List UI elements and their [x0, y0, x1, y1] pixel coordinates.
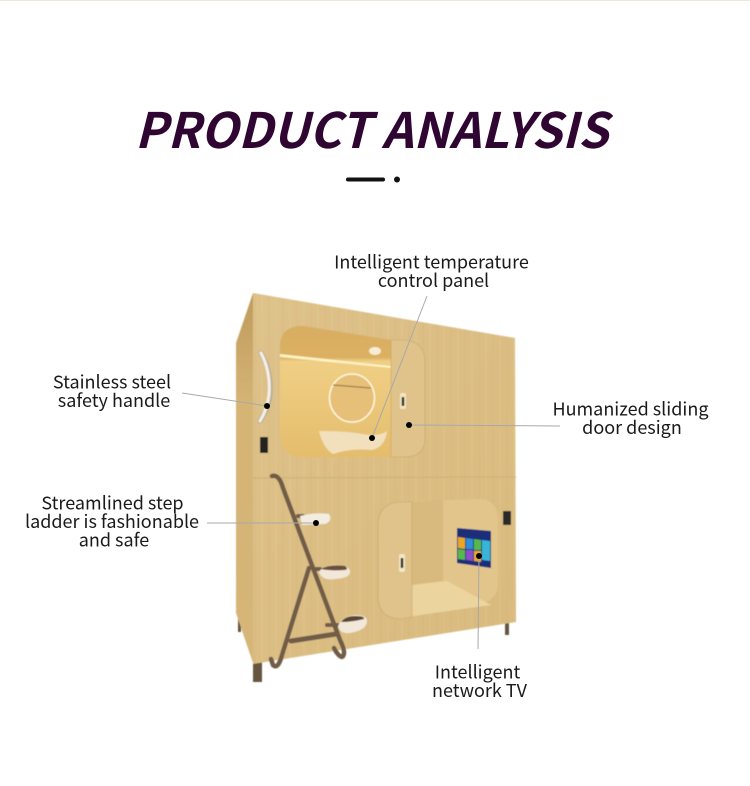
label: network TV: Intelligent	[435, 658, 520, 684]
socket lower	[503, 511, 511, 525]
label: step ladder: ladder is fashionable	[25, 508, 199, 534]
mirror	[330, 374, 374, 422]
title divider	[346, 176, 400, 182]
label: safety handle: Stainless steel	[53, 368, 171, 394]
label: sliding door: Humanized sliding	[552, 396, 709, 422]
lower window	[378, 499, 498, 619]
label: network TV: network TV	[432, 677, 528, 703]
title: PRODUCT ANALYSIS	[135, 93, 614, 163]
cabin side panel	[236, 293, 253, 663]
upper window	[280, 326, 391, 457]
door lock	[400, 393, 406, 409]
lower window back wall	[412, 500, 443, 585]
ladder	[271, 476, 344, 666]
safety handle	[260, 353, 270, 421]
leader lines	[182, 296, 560, 649]
label: step ladder: and safe	[79, 526, 149, 552]
marker dots	[264, 403, 482, 559]
socket upper	[260, 437, 268, 453]
capsule cabin illustration	[236, 293, 516, 682]
label: safety handle: safety handle	[58, 387, 170, 413]
sliding door	[391, 340, 425, 457]
lower door	[378, 502, 412, 619]
label: temperature control panel: Intelligent temperature	[334, 248, 529, 274]
lower window floor	[412, 581, 491, 616]
label: temperature control panel: control panel	[378, 267, 489, 293]
TV	[457, 528, 491, 568]
ladder steps	[300, 513, 367, 633]
label: sliding door: door design	[582, 414, 682, 440]
headboard shelf	[319, 431, 387, 454]
cabin front panel	[253, 293, 516, 664]
label: step ladder: Streamlined step	[41, 490, 184, 516]
legs	[238, 618, 509, 682]
upper window light strip	[280, 354, 391, 368]
